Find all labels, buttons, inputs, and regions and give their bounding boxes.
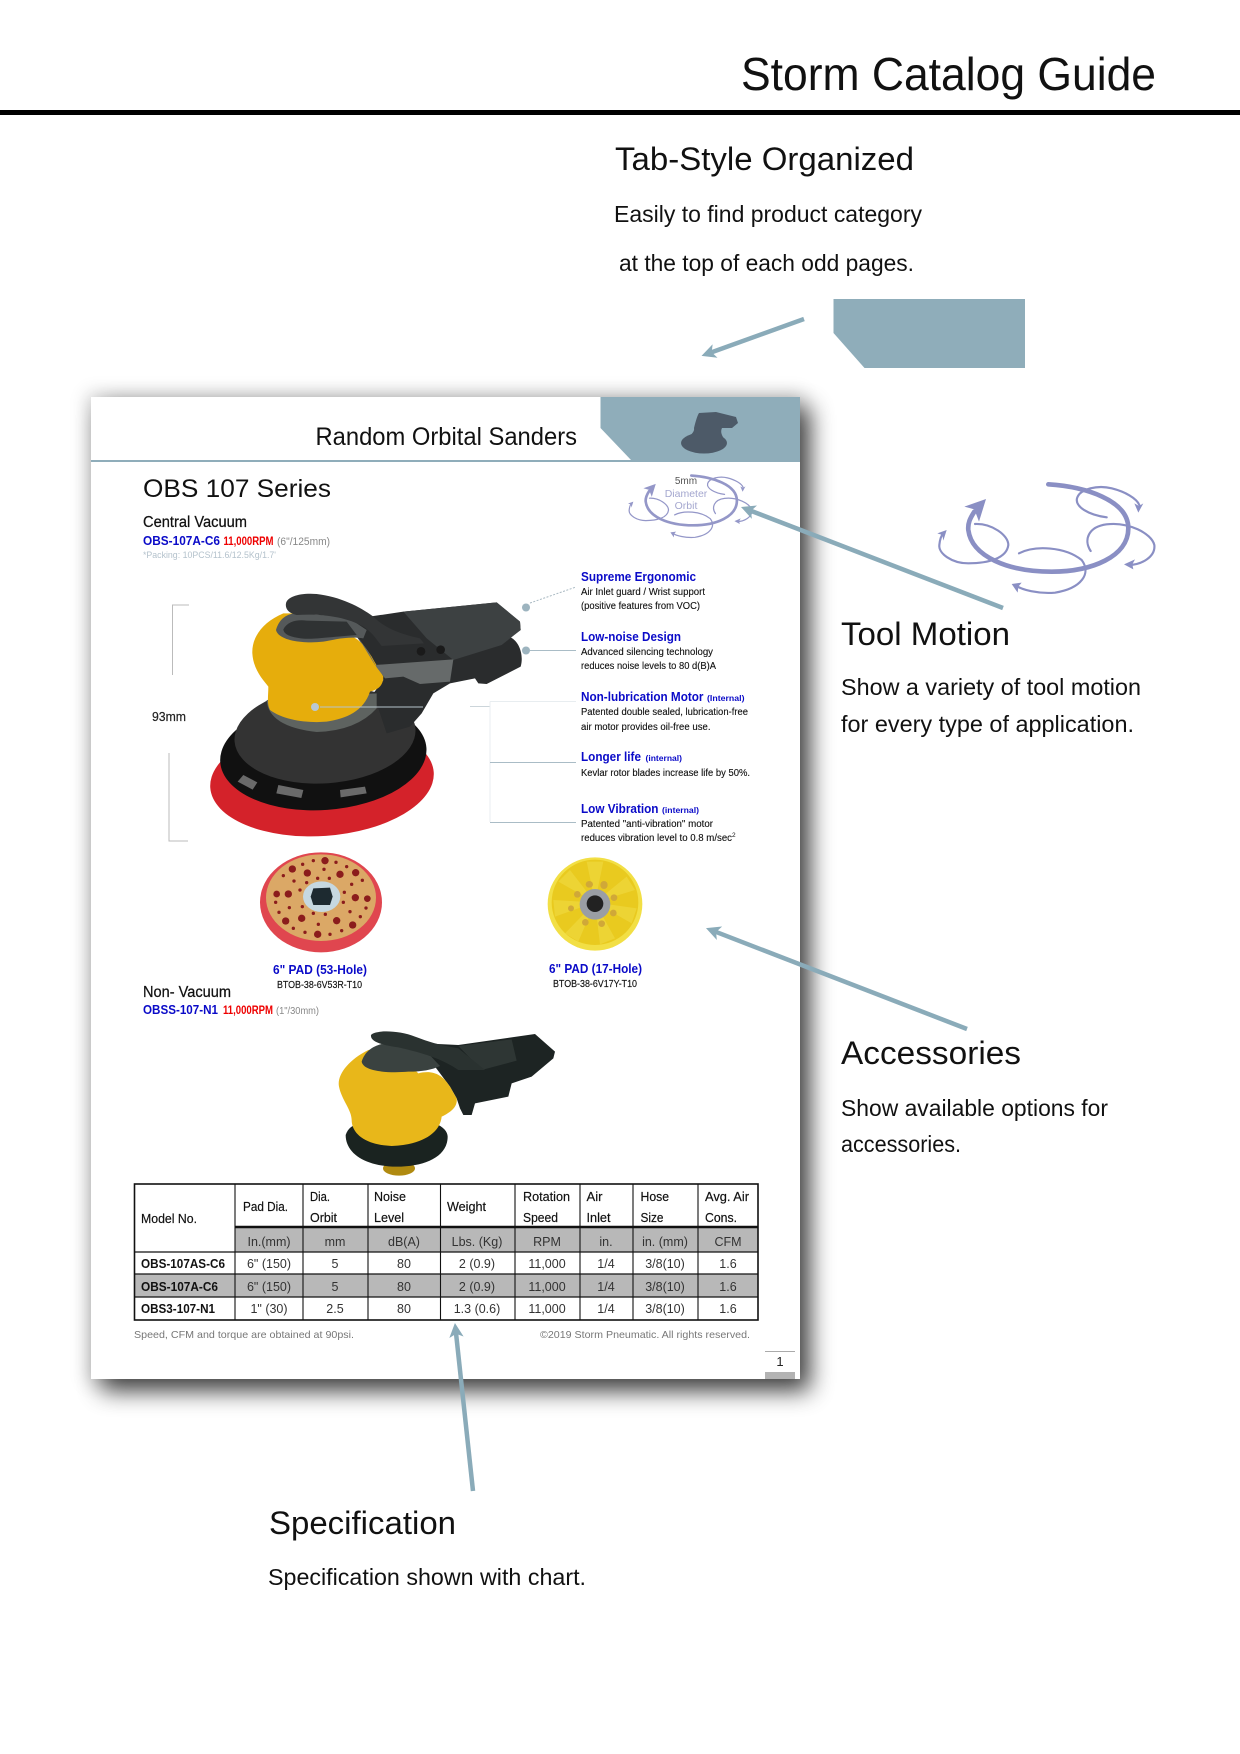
heading: specification: Specification	[269, 1505, 456, 1541]
text: tool motion description: for every type of application.	[841, 711, 1134, 737]
text: accessories description: accessories.	[841, 1131, 961, 1157]
icon: small orbit diagram: Diameter	[665, 488, 708, 500]
central vacuum block: (6"/125mm)	[277, 536, 330, 548]
icon: small orbit diagram: Orbit	[675, 500, 697, 512]
table units row: in.	[599, 1235, 613, 1249]
table row: OBS-107A-C6: 1.6	[719, 1280, 737, 1294]
non-vacuum block	[143, 984, 319, 1017]
accessory: 17-hole pad: BTOB-38-6V17Y-T10	[553, 979, 637, 990]
table row: OBS-107A-C6: 1/4	[597, 1280, 615, 1294]
series heading: OBS 107 Series	[143, 475, 331, 503]
table row: OBS3-107-N1: OBS3-107-N1	[141, 1302, 215, 1316]
text: tool motion description	[841, 674, 1141, 737]
central vacuum block: 11,000RPM	[224, 536, 274, 548]
feature: low vibration: 2	[732, 832, 736, 839]
table header labels: Inlet	[586, 1210, 611, 1225]
table row: OBS-107AS-C6: 1/4	[597, 1257, 615, 1271]
icon: category tab shape	[834, 299, 1025, 368]
feature: non-lubrication motor: (Internal)	[707, 693, 745, 703]
feature: low-noise design: reduces noise levels to 80 d(B)A	[581, 661, 716, 672]
central vacuum block	[143, 514, 330, 561]
table row: OBS3-107-N1: 1/4	[597, 1302, 615, 1316]
accessory: 17-hole pad	[548, 857, 642, 990]
feature: low-noise design	[581, 629, 716, 672]
text: tab-style description	[614, 201, 922, 276]
leader lines	[311, 587, 576, 822]
accessory: 53-hole pad: BTOB-38-6V53R-T10	[277, 980, 362, 991]
feature list	[581, 569, 750, 844]
table header labels: Weight	[447, 1199, 486, 1214]
text: tab-style description: at the top of each odd pages.	[619, 250, 914, 276]
table row: OBS-107A-C6: 3/8(10)	[645, 1280, 685, 1294]
table row: OBS-107A-C6: 11,000	[528, 1280, 566, 1294]
table row: OBS-107AS-C6: 5	[332, 1257, 339, 1271]
icon: sander silhouette	[681, 412, 738, 454]
table header labels: Speed	[523, 1210, 558, 1225]
heading: tab-style organized: Tab-Style Organized	[615, 141, 914, 177]
panel: catalog page sample	[86, 392, 810, 1391]
arrow: specification	[456, 1333, 473, 1491]
feature: supreme ergonomic	[581, 569, 705, 612]
feature: supreme ergonomic: Air Inlet guard / Wrist support	[581, 587, 705, 598]
table header labels: Air	[586, 1189, 603, 1204]
page number: 1	[776, 1354, 784, 1369]
table row: OBS3-107-N1: 1" (30)	[250, 1302, 288, 1316]
feature: longer life: Longer life	[581, 749, 641, 764]
icon: large orbit diagram	[937, 484, 1154, 593]
table header labels: Dia.	[310, 1189, 330, 1204]
table units row: RPM	[533, 1235, 561, 1249]
table row: OBS-107AS-C6: 1.6	[719, 1257, 737, 1271]
table row: OBS3-107-N1: 1.3 (0.6)	[454, 1302, 500, 1316]
table row: OBS3-107-N1: 80	[397, 1302, 411, 1316]
table row: OBS-107A-C6: 5	[332, 1280, 339, 1294]
table units row: CFM	[714, 1235, 742, 1249]
table units row: in. (mm)	[642, 1235, 688, 1249]
non-vacuum block: (1"/30mm)	[276, 1006, 319, 1017]
table row: OBS-107A-C6: 80	[397, 1280, 411, 1294]
icon: small orbit diagram: 5mm	[675, 476, 697, 487]
feature: longer life	[581, 749, 750, 779]
table header labels: Level	[374, 1210, 404, 1225]
feature: longer life: Kevlar rotor blades increase life by 50%.	[581, 768, 750, 779]
table row: OBS3-107-N1: 11,000	[528, 1302, 566, 1316]
feature: non-lubrication motor	[581, 689, 748, 733]
text: tab-style description: Easily to find product category	[614, 201, 922, 227]
table row: OBS3-107-N1: 2.5	[326, 1302, 344, 1316]
table header labels	[141, 1189, 750, 1226]
table units row: dB(A)	[388, 1235, 420, 1249]
icon: small orbit diagram	[628, 476, 752, 537]
text: accessories description	[841, 1095, 1108, 1157]
central vacuum block: *Packing: 10PCS/11.6/12.5Kg/1.7'	[143, 550, 276, 561]
non-vacuum block: OBSS-107-N1	[143, 1002, 218, 1017]
table row: OBS3-107-N1	[141, 1302, 737, 1316]
product image: small sander	[339, 1031, 555, 1176]
table header labels: Avg. Air	[705, 1189, 750, 1204]
table row: OBS-107AS-C6: 2 (0.9)	[459, 1257, 495, 1271]
table header labels: Model No.	[141, 1211, 197, 1226]
accessory: 53-hole pad: 6" PAD (53-Hole)	[273, 962, 367, 977]
spec table	[134, 1184, 758, 1320]
feature: low vibration: reduces vibration level to 0.8 m/sec	[581, 833, 732, 844]
non-vacuum block: Non- Vacuum	[143, 984, 231, 1001]
feature: low vibration	[581, 801, 736, 844]
table header labels: Hose	[640, 1189, 669, 1204]
table row: OBS-107A-C6: 6" (150)	[247, 1280, 291, 1294]
footnote: Speed, CFM and torque are obtained at 90psi.	[134, 1329, 354, 1341]
table row: OBS-107AS-C6	[141, 1257, 737, 1271]
arrow: tab to page header	[711, 319, 804, 352]
heading: accessories: Accessories	[841, 1035, 1021, 1071]
feature: low vibration: Patented "anti-vibration" motor	[581, 819, 714, 830]
title: Storm Catalog Guide	[741, 48, 1156, 100]
arrow: tool motion	[750, 511, 1003, 608]
feature: supreme ergonomic: Supreme Ergonomic	[581, 569, 696, 584]
page header tab	[600, 397, 800, 460]
product image: main sander	[206, 594, 522, 844]
table header labels: Pad Dia.	[243, 1199, 288, 1214]
feature: non-lubrication motor: air motor provides oil-free use.	[581, 722, 710, 733]
table header labels: Rotation	[523, 1189, 570, 1204]
table header labels: Size	[640, 1210, 664, 1225]
table row: OBS-107AS-C6: 80	[397, 1257, 411, 1271]
feature: supreme ergonomic: (positive features from VOC)	[581, 601, 700, 612]
table row: OBS3-107-N1: 1.6	[719, 1302, 737, 1316]
central vacuum block: OBS-107A-C6	[143, 533, 220, 548]
feature: longer life: (internal)	[646, 753, 682, 763]
table units row	[247, 1235, 742, 1249]
table row: OBS-107AS-C6: 11,000	[528, 1257, 566, 1271]
table row: OBS-107A-C6: OBS-107A-C6	[141, 1280, 218, 1294]
accessory: 17-hole pad: 6" PAD (17-Hole)	[549, 961, 642, 976]
copyright: ©2019 Storm Pneumatic. All rights reserved.	[540, 1329, 750, 1341]
table row: OBS-107A-C6: 2 (0.9)	[459, 1280, 495, 1294]
non-vacuum block: 11,000RPM	[223, 1005, 273, 1017]
table row: OBS-107AS-C6: OBS-107AS-C6	[141, 1257, 225, 1271]
arrow: accessories	[715, 932, 967, 1029]
feature: non-lubrication motor: Patented double sealed, lubrication-free	[581, 707, 748, 718]
text: tool motion description: Show a variety of tool motion	[841, 674, 1141, 700]
table header labels: Cons.	[705, 1210, 737, 1225]
text: specification description: Specification shown with chart.	[268, 1564, 586, 1590]
dimension bracket: 93mm	[152, 605, 189, 841]
table units row: In.(mm)	[247, 1235, 291, 1249]
dimension bracket: 93mm: 93mm	[152, 709, 186, 724]
feature: low-noise design: Low-noise Design	[581, 629, 681, 644]
page number	[765, 1351, 795, 1379]
feature: low-noise design: Advanced silencing technology	[581, 647, 713, 658]
table header labels: Orbit	[310, 1210, 337, 1225]
table row: OBS-107A-C6	[141, 1280, 737, 1294]
accessory: 53-hole pad	[260, 852, 382, 991]
text: accessories description: Show available options for	[841, 1095, 1108, 1121]
table row: OBS3-107-N1: 3/8(10)	[645, 1302, 685, 1316]
feature: low vibration: (internal)	[662, 805, 699, 815]
table header labels: Noise	[374, 1189, 406, 1204]
table row: OBS-107AS-C6: 3/8(10)	[645, 1257, 685, 1271]
table units row: Lbs. (Kg)	[452, 1235, 502, 1249]
feature: low vibration: Low Vibration	[581, 801, 659, 816]
table units row: mm	[325, 1235, 345, 1249]
central vacuum block: Central Vacuum	[143, 514, 247, 531]
page heading: Random Orbital Sanders	[316, 423, 577, 451]
heading: tool motion: Tool Motion	[841, 616, 1010, 652]
feature: non-lubrication motor: Non-lubrication Motor	[581, 689, 704, 704]
table row: OBS-107AS-C6: 6" (150)	[247, 1257, 291, 1271]
